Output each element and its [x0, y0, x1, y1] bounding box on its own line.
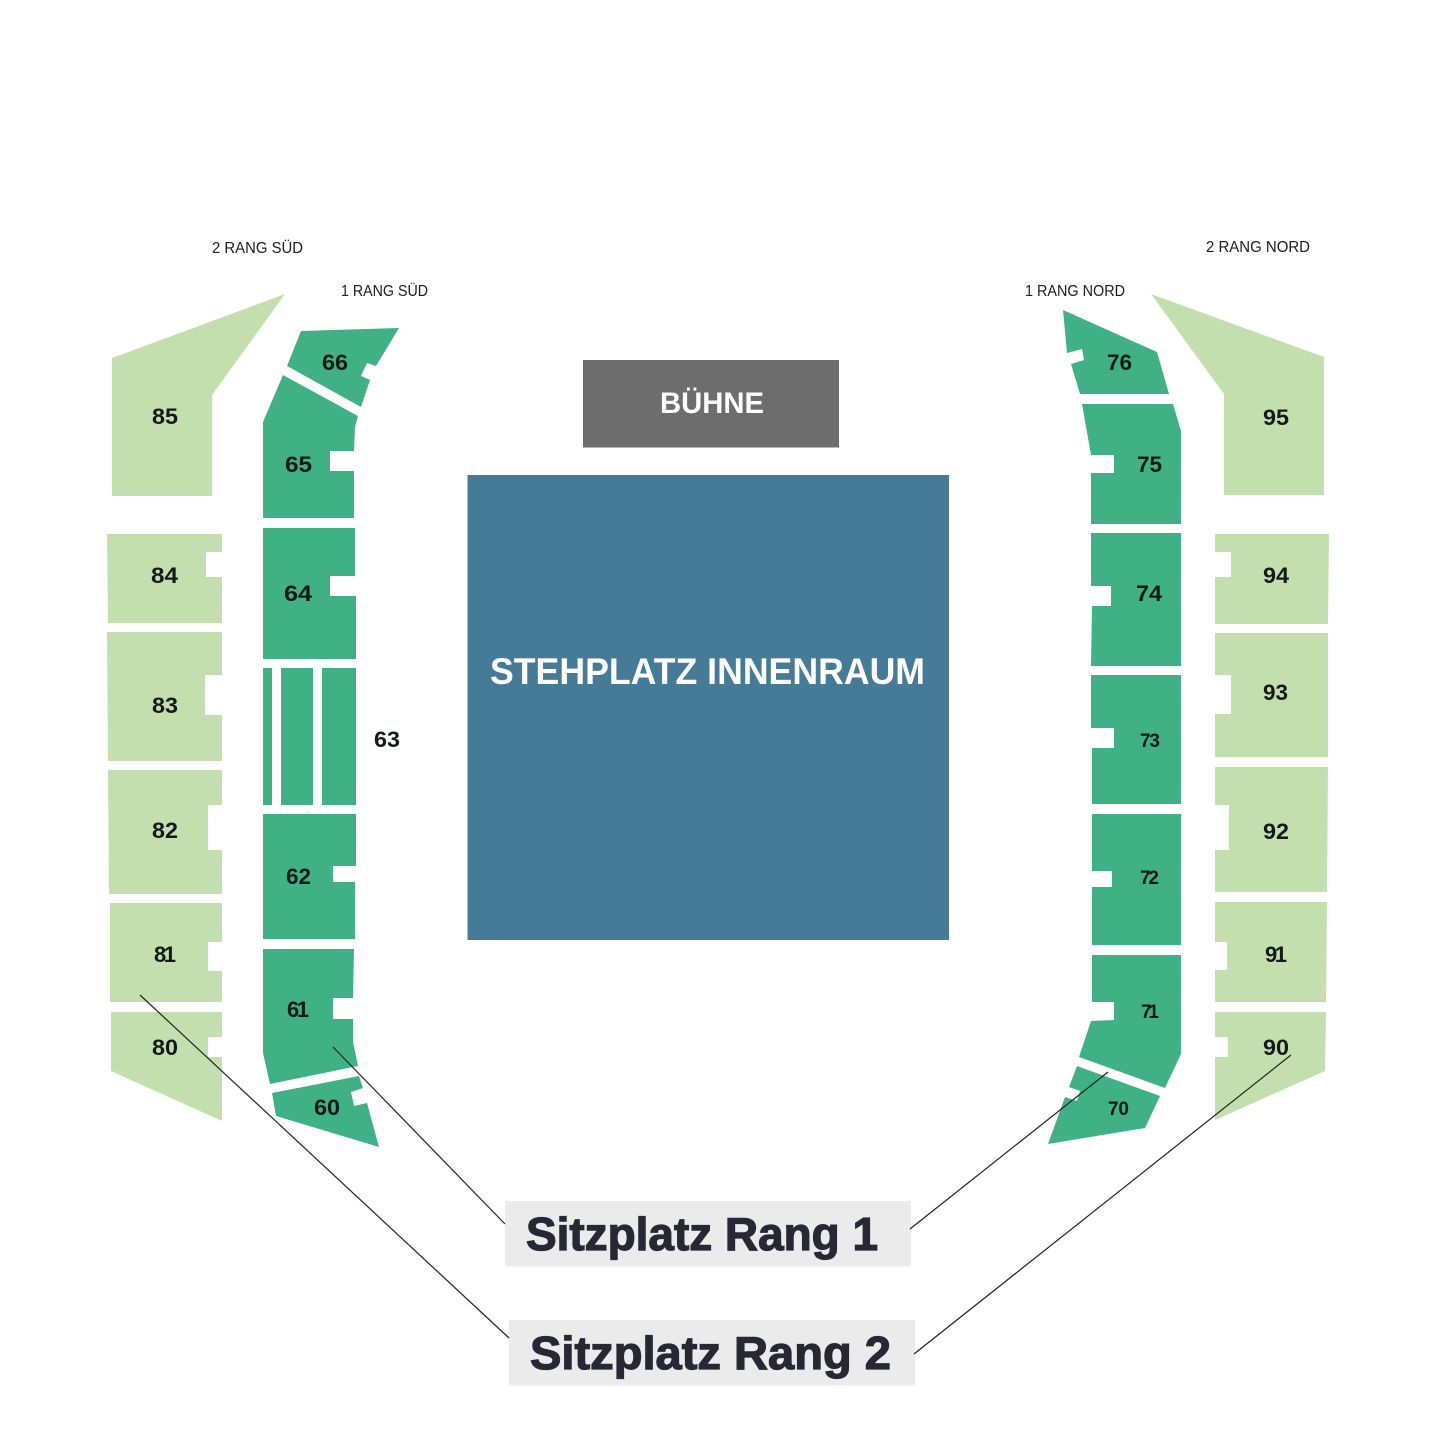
- block 70: [1048, 1066, 1160, 1144]
- block 85: [112, 294, 285, 496]
- label: 1 Rang Nord: 1 RANG NORD: [1025, 283, 1125, 300]
- block 84: [107, 534, 222, 623]
- label: 2 Rang Süd: 2 RANG SÜD: [212, 239, 303, 257]
- block 64: 64: [284, 581, 313, 606]
- panel: standing area: STEHPLATZ INNENRAUM: [490, 651, 925, 692]
- callout: Sitzplatz Rang 2: Sitzplatz Rang 2: [530, 1327, 891, 1379]
- block 63: 63: [374, 727, 400, 752]
- block 66: [287, 328, 399, 407]
- block 73: [1091, 675, 1181, 804]
- panel: stage: BÜHNE: [660, 387, 764, 420]
- block 72: [1092, 814, 1181, 945]
- callout: Sitzplatz Rang 1: [505, 1201, 911, 1266]
- callout: Sitzplatz Rang 2: [509, 1320, 915, 1386]
- block 92: [1215, 767, 1328, 892]
- block 93: 93: [1263, 680, 1288, 705]
- block 75: 75: [1137, 452, 1162, 477]
- block 70: 70: [1108, 1099, 1129, 1120]
- block 76: [1063, 310, 1169, 394]
- block 80: [111, 1012, 222, 1121]
- block 84: 84: [151, 563, 179, 588]
- block 95: [1151, 294, 1324, 495]
- block 81: [110, 903, 222, 1002]
- block 90: [1215, 1012, 1326, 1120]
- block 94: [1215, 534, 1329, 624]
- block 60: 60: [314, 1095, 340, 1120]
- block 73: 73: [1140, 731, 1160, 752]
- block 76: 76: [1107, 350, 1132, 375]
- callout: Sitzplatz Rang 1: Sitzplatz Rang 1: [526, 1208, 878, 1260]
- panel: Rang 2 Nord: [1151, 294, 1329, 1120]
- block 71: 71: [1141, 1002, 1159, 1023]
- block 82: [108, 770, 222, 894]
- panel: Rang 2 Süd: [107, 294, 285, 1121]
- block 72: 72: [1140, 868, 1159, 889]
- block 62: [263, 814, 356, 939]
- block 62: 62: [286, 864, 311, 889]
- panel: standing area: [468, 475, 949, 940]
- panel: Rang 1 Süd: [263, 328, 400, 1147]
- block 74: 74: [1136, 581, 1163, 606]
- block 65: [263, 375, 358, 518]
- block 60: [272, 1076, 379, 1147]
- block 83: 83: [152, 693, 178, 718]
- block 75: [1082, 404, 1181, 524]
- block 90: 90: [1263, 1035, 1289, 1060]
- block 91: [1215, 902, 1327, 1002]
- block 64: [263, 528, 356, 659]
- block 63: [263, 668, 400, 805]
- block 92: 92: [1263, 819, 1289, 844]
- block 66: 66: [322, 350, 348, 375]
- block 81: 81: [154, 942, 176, 967]
- label: 1 Rang Süd: 1 RANG SÜD: [341, 282, 428, 300]
- leader line: Rang 1 left: [333, 1047, 505, 1224]
- panel: stage: [583, 360, 839, 448]
- block 85: 85: [152, 404, 178, 429]
- block 95: 95: [1263, 405, 1289, 430]
- block 61: 61: [287, 997, 309, 1022]
- block 74: [1091, 533, 1181, 666]
- panel: Rang 1 Nord: [1048, 310, 1181, 1144]
- label: 2 Rang Nord: 2 RANG NORD: [1206, 239, 1310, 256]
- block 93: [1215, 633, 1328, 757]
- block 80: 80: [152, 1035, 178, 1060]
- block 61: [263, 949, 358, 1084]
- block 71: [1079, 955, 1181, 1088]
- block 65: 65: [285, 452, 312, 477]
- leader line: Rang 2 right: [914, 1055, 1291, 1354]
- block 83: [107, 632, 222, 761]
- block 91: 91: [1265, 942, 1287, 967]
- block 94: 94: [1263, 563, 1290, 588]
- block 82: 82: [152, 818, 178, 843]
- leader line: Rang 2 left: [140, 995, 509, 1338]
- leader line: Rang 1 right: [910, 1072, 1108, 1229]
